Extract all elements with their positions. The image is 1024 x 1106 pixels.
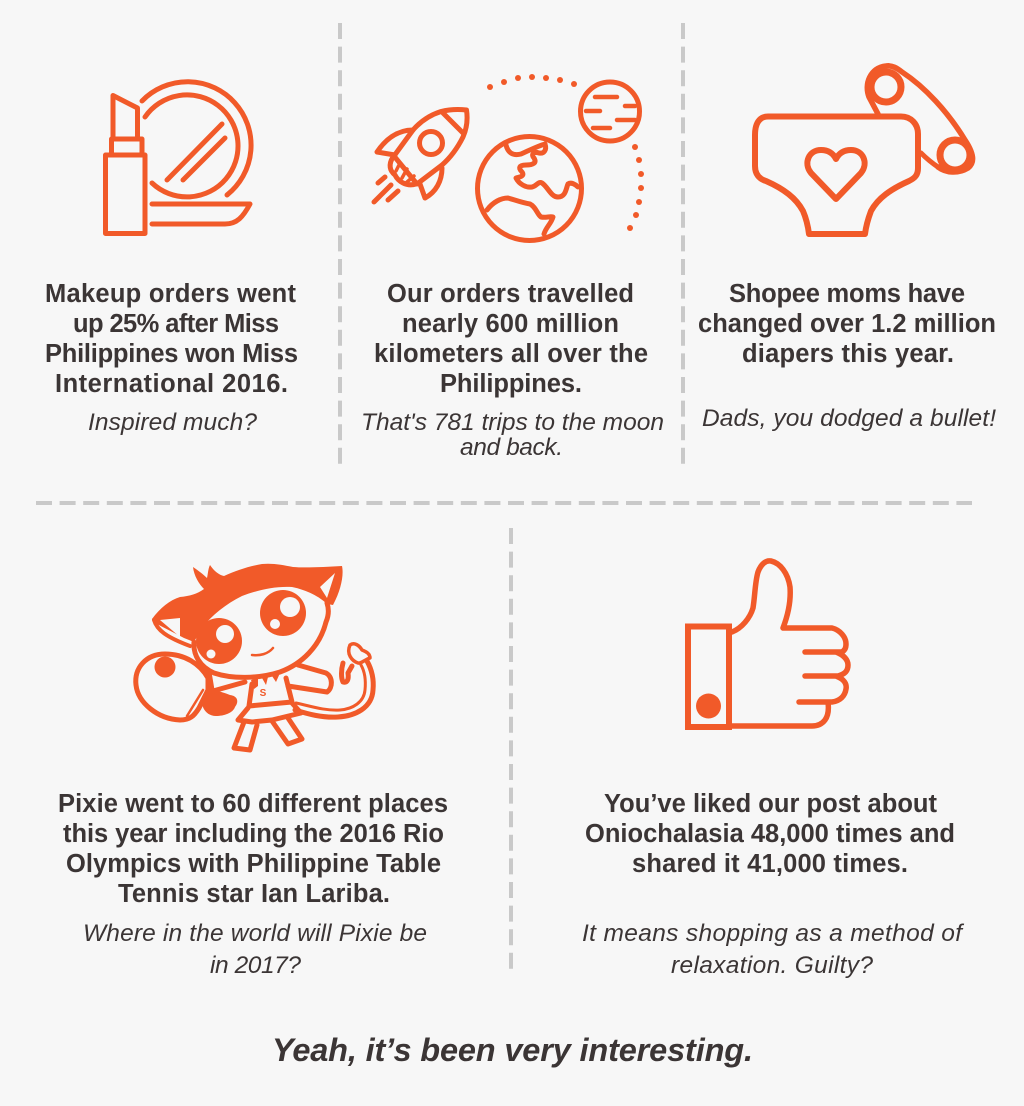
heading: [585, 790, 955, 878]
caption: relaxation. Guilty?: [671, 952, 873, 979]
heading: [374, 280, 648, 398]
caption: [361, 409, 664, 461]
heading: International 2016.: [55, 370, 288, 398]
heading: this year including the 2016 Rio: [63, 820, 444, 848]
caption: It means shopping as a method of: [582, 920, 964, 947]
heading: Olympics with Philippine Table: [66, 850, 441, 878]
eyes: [196, 590, 306, 664]
hand and body: [202, 691, 237, 716]
heading: changed over 1.2 million: [698, 310, 996, 338]
heading: Philippines.: [440, 370, 582, 398]
closing line: Yeah, it’s been very interesting.: [272, 1032, 753, 1068]
heading: Oniochalasia 48,000 times and: [585, 820, 955, 848]
icon: rocket, earth and planet: [374, 74, 644, 240]
text block: Pixie travels: [58, 790, 448, 979]
text block: likes and shares: [582, 790, 964, 979]
heading: shared it 41,000 times.: [632, 850, 908, 878]
icon: rocket: [374, 110, 467, 202]
icon: Pixie mascot: [136, 564, 373, 750]
heading: kilometers all over the: [374, 340, 648, 368]
caption: and back.: [460, 434, 563, 461]
text block: orders travelled: [361, 280, 664, 461]
icon: thumbs up: [688, 561, 848, 727]
text block: diapers: [698, 280, 996, 432]
text block: makeup orders: [45, 280, 298, 436]
inner ears: [160, 573, 335, 637]
caption: That's 781 trips to the moon: [361, 409, 664, 436]
heading: Shopee moms have: [729, 280, 965, 308]
icon: lipstick and compact mirror: [106, 82, 251, 234]
tail ball: [136, 654, 208, 720]
heading: nearly 600 million: [402, 310, 619, 338]
heading: Pixie went to 60 different places: [58, 790, 448, 818]
smile: [252, 648, 273, 655]
heading: [58, 790, 448, 908]
tail and hand: [295, 661, 373, 717]
heading: Our orders travelled: [387, 280, 634, 308]
heading: You’ve liked our post about: [604, 790, 938, 818]
face outline: [194, 603, 328, 677]
caption: Dads, you dodged a bullet!: [702, 405, 996, 432]
icon: Pixie mascot: S: [260, 688, 267, 699]
heading: Makeup orders went: [45, 280, 296, 308]
icon: diaper with safety pin: [755, 66, 973, 234]
caption: [83, 920, 427, 979]
heading: Tennis star Ian Lariba.: [118, 880, 390, 908]
caption: in 2017?: [210, 952, 301, 979]
icon: earth: [478, 136, 582, 240]
left ear outline: [154, 620, 190, 646]
orbit dots: [487, 74, 644, 231]
caption: Where in the world will Pixie be: [83, 920, 427, 947]
heading: Philippines won Miss: [45, 340, 298, 368]
hair and ears: [152, 564, 343, 642]
heading: [45, 280, 298, 398]
icon: striped planet: [580, 82, 640, 141]
caption: Inspired much?: [88, 409, 257, 436]
heading: up 25% after Miss: [73, 310, 279, 338]
heading: diapers this year.: [742, 340, 954, 368]
heading: [698, 280, 996, 368]
caption: [582, 920, 964, 979]
